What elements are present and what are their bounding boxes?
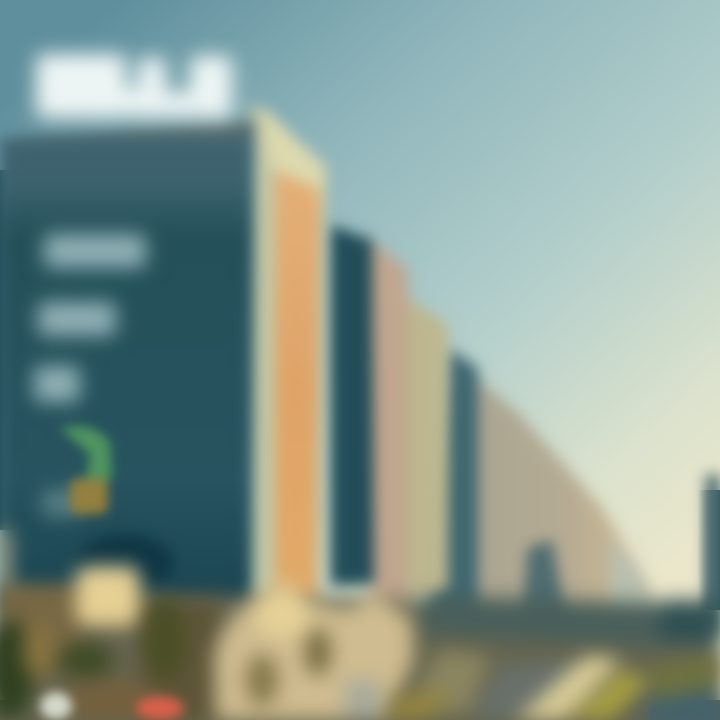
right edge dark building (706, 475, 720, 635)
main building (0, 102, 326, 610)
middle buildings (330, 225, 448, 610)
ground and street (0, 530, 720, 720)
rooftop sign (36, 54, 232, 118)
edge backing strips (0, 170, 720, 720)
vehicles (40, 692, 184, 720)
podium entrance (214, 578, 414, 720)
main building side wall (250, 102, 326, 610)
trees left (0, 598, 185, 720)
logo mark (60, 426, 112, 514)
street base (0, 592, 720, 720)
distant building row (430, 348, 662, 640)
facade labels (34, 234, 146, 516)
main building facade (0, 120, 254, 610)
podium left (0, 530, 220, 720)
road markings (385, 650, 720, 720)
